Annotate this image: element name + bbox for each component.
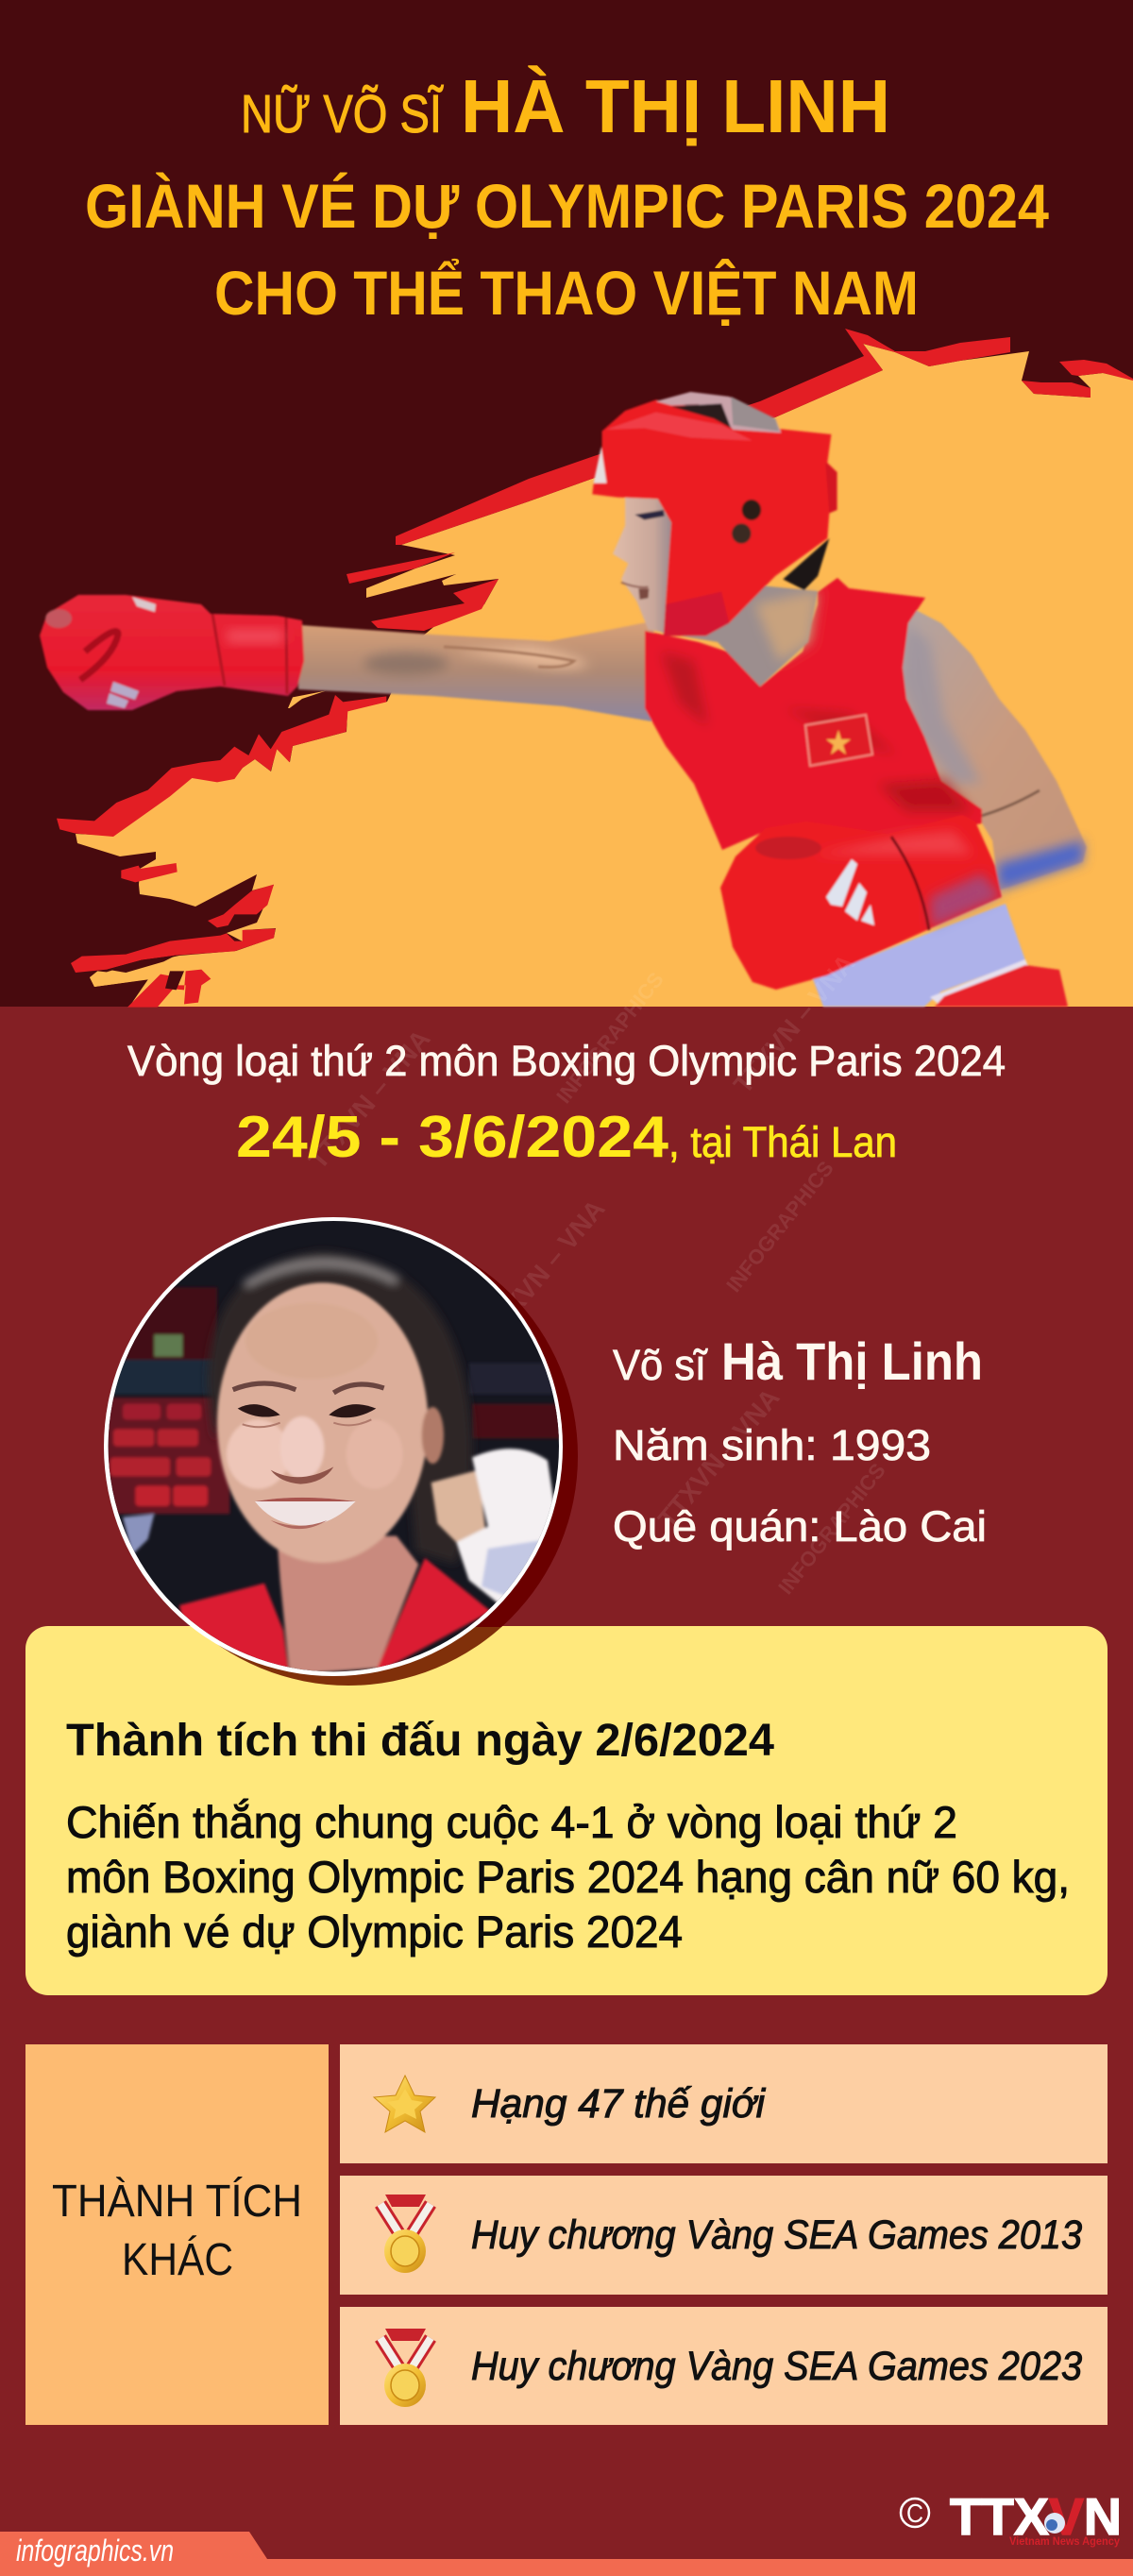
event subtitle: Vòng loại thứ 2 môn Boxing Olympic Paris 2024 bbox=[127, 1037, 1006, 1085]
logo: TTXVN: C bbox=[906, 2499, 923, 2528]
row: world ranking bbox=[340, 2044, 1108, 2163]
boxer near arm bbox=[897, 609, 1087, 890]
punching glove bbox=[40, 595, 304, 710]
watermarks: TTXVN – VNA bbox=[478, 1194, 611, 1345]
neck bbox=[661, 585, 818, 686]
row: SEA Games 2013 gold medal bbox=[340, 2176, 1108, 2295]
icon: medal bbox=[380, 2195, 431, 2273]
athlete details: Quê quán: Lào Cai bbox=[613, 1502, 987, 1551]
logo: TTXVN: Vietnam News Agency bbox=[1009, 2534, 1120, 2548]
title bbox=[85, 64, 1049, 328]
title: NỮ VÕ SĨ bbox=[241, 84, 444, 144]
achievement text: Chiến thắng chung cuộc 4-1 ở vòng loại thứ 2 bbox=[66, 1797, 957, 1847]
photo: boxer punching bbox=[40, 392, 1087, 1007]
watermarks: TTXVN – VNA bbox=[303, 1024, 436, 1175]
watermarks: TTXVN – VNA bbox=[728, 948, 861, 1099]
panel: other achievements heading bbox=[25, 2044, 329, 2425]
event date and place bbox=[236, 1105, 897, 1170]
boxer far arm bbox=[298, 621, 661, 721]
athlete details: Năm sinh: 1993 bbox=[613, 1421, 931, 1469]
panel: other achievements heading: THÀNH TÍCH bbox=[52, 2177, 302, 2227]
portrait shadow bbox=[217, 1258, 578, 1686]
row: SEA Games 2023 gold medal bbox=[340, 2307, 1108, 2425]
achievement text bbox=[66, 1716, 1070, 1957]
achievement text: giành vé dự Olympic Paris 2024 bbox=[66, 1907, 683, 1957]
title: CHO THỂ THAO VIỆT NAM bbox=[214, 258, 919, 328]
title: HÀ THỊ LINH bbox=[461, 64, 890, 148]
title: GIÀNH VÉ DỰ OLYMPIC PARIS 2024 bbox=[85, 171, 1049, 241]
portrait jersey bbox=[179, 1558, 491, 1678]
athlete details bbox=[613, 1331, 987, 1551]
icon: medal bbox=[380, 2329, 431, 2407]
face bbox=[613, 498, 671, 633]
footer bar bbox=[0, 2532, 1133, 2576]
row: world ranking: Hạng 47 thế giới bbox=[471, 2081, 766, 2127]
achievement text: Thành tích thi đấu ngày 2/6/2024 bbox=[66, 1716, 774, 1766]
portrait hair bbox=[208, 1251, 472, 1565]
watermarks: INFOGRAPHICS bbox=[721, 1157, 838, 1296]
achievement text: môn Boxing Olympic Paris 2024 hạng cân nữ 60 kg, bbox=[66, 1852, 1070, 1902]
watermarks: TTXVN – VNA bbox=[652, 1382, 786, 1534]
athlete details: Võ sĩ bbox=[613, 1341, 708, 1389]
guard glove bbox=[720, 815, 1002, 990]
icon: gold star bbox=[374, 2076, 435, 2132]
athlete details: Hà Thị Linh bbox=[721, 1331, 983, 1391]
flag on jersey bbox=[805, 715, 872, 766]
panel: other achievements heading: KHÁC bbox=[122, 2235, 233, 2285]
row: SEA Games 2023 gold medal: Huy chương Vàng SEA Games 2023 bbox=[471, 2344, 1082, 2389]
logo: TTXVN: TTXVN bbox=[950, 2487, 1122, 2546]
row: SEA Games 2013 gold medal: Huy chương Vàng SEA Games 2013 bbox=[471, 2212, 1082, 2258]
watermarks: INFOGRAPHICS bbox=[551, 968, 668, 1108]
waistband and shorts bbox=[813, 904, 1068, 1007]
jersey bbox=[645, 578, 982, 850]
portrait facial features bbox=[233, 1383, 384, 1529]
helmet bbox=[592, 392, 837, 636]
panel: hero background bbox=[0, 0, 1133, 1008]
panel: achievement on 2/6/2024 bbox=[25, 1626, 1108, 1995]
watermarks bbox=[303, 948, 890, 1599]
photo: portrait of Hà Thị Linh bbox=[104, 1217, 563, 1676]
footer bar: infographics.vn bbox=[16, 2534, 174, 2568]
event date and place: , tại Thái Lan bbox=[668, 1118, 897, 1166]
watermarks: INFOGRAPHICS bbox=[773, 1459, 890, 1599]
event date and place: 24/5 - 3/6/2024 bbox=[236, 1105, 669, 1170]
